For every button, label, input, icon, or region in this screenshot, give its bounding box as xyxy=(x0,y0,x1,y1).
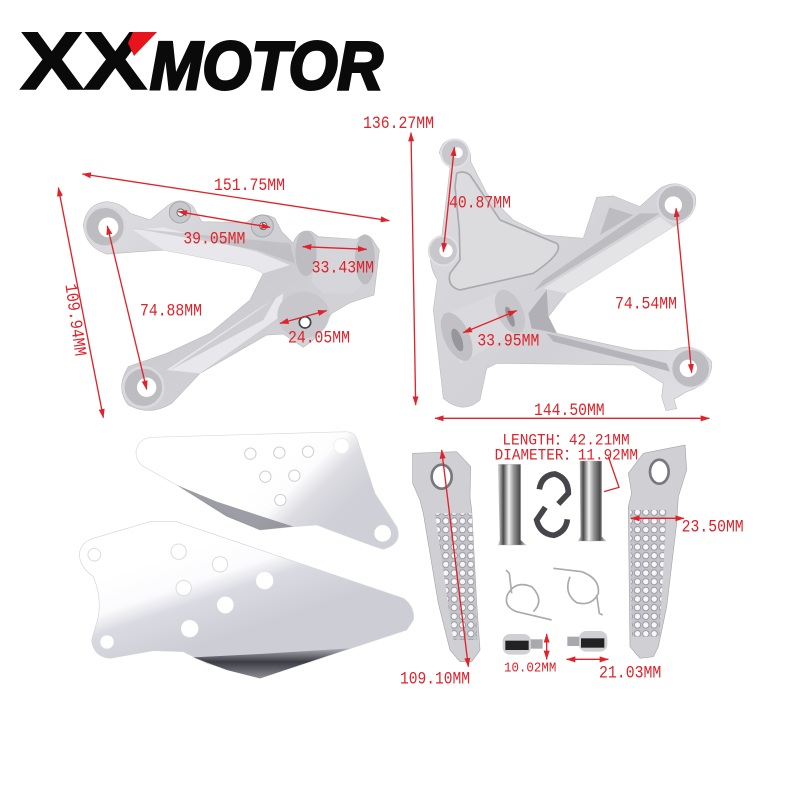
panel: foot pegs and hardware xyxy=(400,431,744,689)
left bracket body xyxy=(83,201,379,410)
upper plate shadow xyxy=(177,485,293,530)
bolt left xyxy=(503,634,543,655)
lower plate xyxy=(79,522,414,678)
logo MOTOR letters: MOTOR xyxy=(150,28,383,104)
left foot peg xyxy=(413,452,480,662)
left bracket block xyxy=(312,237,367,293)
right peg tread xyxy=(630,510,667,637)
pin left xyxy=(498,464,526,545)
logo: XXMOTOR xyxy=(20,16,383,107)
lower plate holes xyxy=(88,544,273,649)
e-clip top xyxy=(539,474,568,504)
logo red accent xyxy=(128,32,157,56)
panel: left bracket xyxy=(58,174,389,418)
small ring 2 xyxy=(251,215,273,237)
dimension arrows: right bracket xyxy=(411,133,709,418)
dimension labels: right bracket: 136.27MM xyxy=(363,115,434,134)
dimension labels: pegs: 21.03MM xyxy=(599,664,661,683)
spring left xyxy=(506,570,552,620)
lower rib xyxy=(547,333,670,372)
upper right hole xyxy=(665,196,682,214)
rib highlight xyxy=(543,217,673,293)
diagonal rib xyxy=(533,213,660,292)
right peg hole xyxy=(650,460,669,484)
pin right xyxy=(578,461,606,541)
dimension labels: pegs: 109.10MM xyxy=(400,670,470,689)
upper-left hole xyxy=(98,217,118,237)
dimension arrows: pegs xyxy=(442,450,684,667)
left bracket mount dish xyxy=(277,292,329,338)
lower plate shadow xyxy=(193,648,350,678)
middle ring xyxy=(429,236,458,265)
left peg hole xyxy=(432,465,452,489)
lug 1 slot xyxy=(449,327,466,353)
right bracket body xyxy=(430,139,712,411)
small ring 1 xyxy=(169,202,191,223)
panel: heel plates xyxy=(79,432,414,678)
dimension labels: left bracket: 33.43MM xyxy=(312,259,374,278)
left bracket lug 1 xyxy=(295,231,317,276)
mount hole xyxy=(299,317,311,328)
bolt right xyxy=(567,631,607,652)
logo X letters: XX xyxy=(20,16,147,107)
upper-left ring xyxy=(85,207,125,247)
top hole xyxy=(452,147,463,158)
dimension labels: left bracket xyxy=(59,177,374,357)
small hole 2 xyxy=(260,222,267,230)
lug 2 xyxy=(489,285,531,338)
dimension labels: right bracket: 40.87MM xyxy=(449,194,511,213)
dimension labels: right bracket xyxy=(363,115,677,421)
panel: right bracket xyxy=(363,115,712,421)
dimension labels: pegs: DIAMETER：11.92MM xyxy=(495,446,638,464)
left bracket lug 2 xyxy=(355,234,375,284)
dimension labels: left bracket: 109.94MM xyxy=(59,283,88,357)
lug 2 slot xyxy=(503,306,517,328)
lug 1 xyxy=(434,308,479,366)
upper plate xyxy=(136,432,398,549)
dimension arrows: left bracket xyxy=(58,174,389,418)
left bracket shadows xyxy=(133,228,295,370)
dimension labels: left bracket: 24.05MM xyxy=(288,330,350,349)
dimension labels: right bracket: 33.95MM xyxy=(477,332,539,351)
lower right hole xyxy=(680,360,697,377)
middle hole xyxy=(439,244,453,257)
small hole 1 xyxy=(177,209,184,216)
e-clip bottom xyxy=(537,507,567,535)
upper right ring xyxy=(658,185,694,222)
lower right ring xyxy=(671,349,710,388)
dimension labels: right bracket: 74.54MM xyxy=(615,295,677,314)
dimension labels: pegs: 23.50MM xyxy=(682,519,744,538)
inner shadow xyxy=(528,290,557,333)
dimension labels: right bracket: 144.50MM xyxy=(534,402,605,421)
dimension labels: left bracket: 151.75MM xyxy=(214,177,285,196)
block between lugs xyxy=(440,293,523,363)
top ring xyxy=(441,139,469,167)
dimension labels: pegs xyxy=(400,431,744,689)
left peg tread xyxy=(435,513,477,640)
spring right xyxy=(553,568,603,615)
triangular tab recess xyxy=(600,207,633,235)
dimension labels: pegs: LENGTH：42.21MM xyxy=(502,431,630,449)
recessed panel xyxy=(449,172,558,290)
right foot peg xyxy=(628,445,687,658)
left bracket highlights xyxy=(133,227,290,373)
upper plate holes xyxy=(245,438,391,542)
dimension labels: left bracket: 39.05MM xyxy=(183,230,245,249)
lower ring xyxy=(123,367,163,407)
lower hole xyxy=(137,378,156,397)
dimension labels: left bracket: 74.88MM xyxy=(140,303,202,322)
dimension labels: pegs: 10.02MM xyxy=(504,660,556,676)
